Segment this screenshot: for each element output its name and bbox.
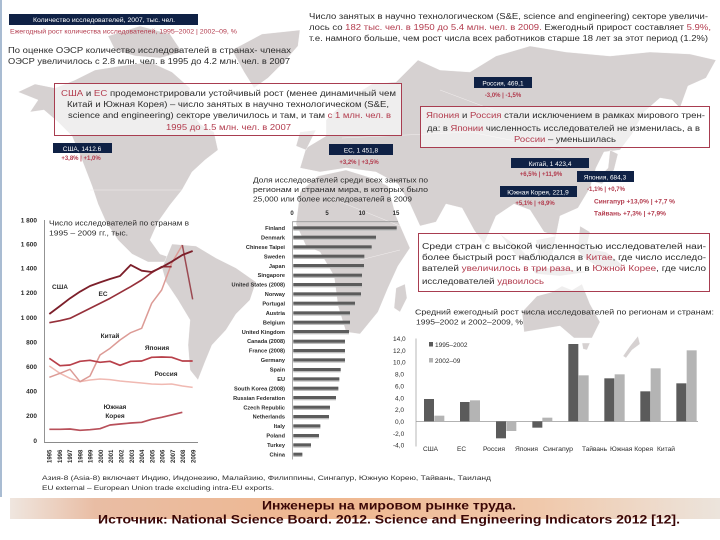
callout: USA and EU growth: Китай и Южная Корея) – число занятых в научно технологическом (S&E,	[67, 100, 389, 109]
caption source: Источник: National Science Board. 2012. Science and Engineering Indicators 2012 [12].	[98, 514, 680, 526]
y axis labels: 1 400	[21, 266, 37, 272]
text block: employment in S&E: Число занятых в научно технологическом (S&E, science and engineering) секторе увеличи-	[309, 12, 708, 21]
y axis labels: -2,0	[393, 431, 405, 438]
country labels	[232, 226, 286, 458]
x axis years: 1997	[68, 449, 74, 463]
x axis years: 1995	[48, 449, 54, 463]
y axis labels: 0,0	[395, 419, 404, 426]
y axis labels: 0	[33, 438, 37, 445]
y axis labels: 12,0	[393, 348, 406, 355]
axis values: 10	[359, 211, 366, 217]
left edge strip	[0, 0, 2, 497]
legend	[429, 342, 468, 365]
category labels	[423, 445, 675, 453]
series labels: США	[52, 284, 68, 291]
country labels: Spain	[270, 368, 286, 374]
y axis labels: 10,0	[393, 360, 406, 367]
country labels: Chinese Taipei	[246, 245, 285, 251]
category labels: ЕС	[457, 446, 466, 453]
country labels: Czech Republic	[243, 405, 285, 411]
map label: Russia: -3,0% | -1,5%	[485, 93, 522, 99]
map label: Japan: Япония, 684,3	[584, 174, 627, 182]
chart title: 1995 – 2009 гг., тыс.	[49, 228, 128, 238]
x axis years: 2002	[120, 449, 126, 463]
map label: USA	[53, 143, 112, 162]
series labels: Япония	[145, 345, 169, 352]
category labels: США	[423, 446, 439, 453]
map label: EU: ЕС, 1 451,8	[344, 148, 379, 154]
category labels: Сингапур	[543, 446, 573, 453]
chart title	[415, 308, 714, 326]
country labels: France (2008)	[249, 349, 285, 355]
chart title: 1995–2002 и 2002–2009, %	[416, 320, 523, 326]
map label: EU: +3,2% | +3,5%	[339, 160, 379, 166]
country labels: China	[269, 452, 286, 458]
chart title: Средний ежегодный рост числа исследователей по регионам и странам:	[415, 308, 714, 316]
y axis labels: 2,0	[395, 407, 404, 414]
x axis years: 1996	[58, 449, 64, 463]
country labels: United States (2008)	[232, 283, 285, 289]
y axis labels: 6,0	[395, 383, 404, 390]
chart title	[49, 218, 189, 238]
map label: Russia: Россия, 469,1	[482, 80, 524, 88]
country labels: Norway	[265, 292, 286, 298]
column chart: average annual growth	[393, 308, 714, 453]
x axis years: 1998	[78, 449, 84, 463]
map label: USA: +3,8% | +1,0%	[61, 156, 101, 162]
caption title: Инженеры на мировом рынке труда.	[262, 500, 516, 512]
map label: Japan: -1,1% | +0,7%	[587, 187, 626, 193]
series labels: ЕС	[98, 291, 108, 298]
axis values: 15	[393, 211, 400, 217]
y axis labels: 1 800	[21, 218, 37, 224]
country labels: Japan	[269, 264, 286, 270]
x axis years: 2003	[130, 449, 136, 463]
map label: Singapore: Сингапур +13,0% | +7,7 %	[594, 200, 676, 206]
country labels: EU	[277, 377, 285, 383]
y axis labels: 14,0	[393, 336, 406, 343]
country labels: Sweden	[264, 254, 286, 260]
legend: 2002–09	[435, 358, 461, 365]
country labels: Poland	[266, 434, 286, 440]
x axis years: 2006	[161, 449, 167, 463]
x axis years: 1999	[89, 449, 95, 463]
y axis labels: 1 000	[21, 315, 37, 322]
y axis labels: -4,0	[393, 443, 405, 450]
horizontal bar chart: researcher share	[232, 176, 428, 460]
map label: South Korea: Южная Корея, 221,9	[507, 190, 569, 196]
x axis years: 2008	[181, 449, 187, 463]
series labels: Южная	[104, 404, 127, 411]
y axis labels: 4,0	[395, 395, 404, 402]
chart title: 25,000 или более исследователей в 2009	[253, 196, 412, 204]
callout: Japan and Russia exception: Япония и Россия стали исключением в рамках мирового трен-	[426, 111, 705, 120]
line chart: researchers by country	[21, 218, 198, 463]
bars	[293, 226, 397, 457]
callout: China and South Korea fastest growth: более быстрый рост наблюдался в Китае , где число исследо-	[422, 253, 706, 262]
x axis years: 2004	[140, 449, 146, 463]
y axis labels: 800	[26, 340, 37, 346]
series labels: Корея	[105, 413, 125, 420]
category labels: Тайвань	[582, 445, 608, 453]
x axis years: 2005	[150, 449, 156, 463]
axis values	[290, 211, 400, 217]
world map background	[18, 26, 716, 380]
callout: China and South Korea fastest growth	[418, 234, 710, 292]
callout: Japan and Russia exception: да: в Японии численность исследователей не изменилась, а в	[427, 124, 700, 133]
country labels: Finland	[265, 226, 286, 232]
country labels: Belgium	[263, 320, 285, 326]
x axis years: 2007	[171, 449, 177, 463]
map label: South Korea	[500, 186, 577, 207]
callout: China and South Korea fastest growth: Среди стран с высокой численностью исследователей наи-	[422, 242, 706, 251]
country labels: Portugal	[262, 302, 285, 308]
chart title: регионам и странам мира, в которых было	[253, 186, 428, 194]
text block: OECD estimate: ОЭСР увеличилось с 2.8 млн. чел. в 1995 до 4.2 млн. чел. в 2007	[8, 57, 291, 66]
category labels: Южная Корея	[610, 446, 653, 453]
callout: China and South Korea fastest growth: исследователей удвоилось	[422, 277, 544, 286]
y axis labels: 1 200	[21, 290, 37, 297]
x axis years	[48, 449, 198, 463]
map label: Taiwan: Тайвань +7,3% | +7,9%	[594, 210, 667, 218]
axes	[44, 220, 198, 442]
legend: 1995–2002	[435, 342, 468, 349]
legend: researchers header: Количество исследователей, 2007, тыс. чел.	[33, 17, 175, 24]
legend: researchers header	[9, 14, 198, 25]
axis values: 5	[325, 211, 329, 217]
y axis labels: 600	[26, 364, 37, 371]
map label: Japan	[577, 171, 634, 193]
axes	[292, 222, 398, 460]
footnote: Азия-8 (Asia-8) включает Индию, Индонезию, Малайзию, Филиппины, Сингапур, Южную Корею, Тайвань, Таиланд	[42, 474, 491, 482]
country labels: Russian Federation	[233, 396, 286, 402]
columns	[424, 344, 697, 438]
y axis labels	[393, 336, 406, 450]
chart title	[253, 176, 428, 204]
country labels: Denmark	[261, 236, 286, 242]
country labels: Turkey	[267, 443, 286, 449]
callout: China and South Korea fastest growth: вателей увеличилось в три раза, и в Южной Корее , где число	[422, 264, 707, 273]
axis values: 0	[290, 211, 294, 217]
text block: employment in S&E: т.е. намного больше, чем рост числа всех работников старше 18 лет за этот период (1.2%)	[309, 34, 708, 43]
legend: growth rate label: Ежегодный рост количества исследователей, 1995–2002 | 2002–09, %	[10, 28, 238, 36]
callout: Japan and Russia exception: России – уменьшилась	[514, 135, 616, 144]
map label: China: +6,5% | +11,9%	[520, 172, 563, 178]
text block: OECD estimate: По оценке ОЭСР количество исследователей в странах- членах	[8, 46, 291, 55]
axes	[416, 338, 698, 446]
country labels: United Kingdom	[242, 330, 285, 336]
footnote	[42, 474, 491, 492]
series labels: Китай	[101, 332, 119, 340]
chart title: Число исследователей по странам в	[49, 218, 189, 228]
country labels: Canada (2008)	[247, 339, 285, 345]
x axis years: 2001	[109, 449, 115, 463]
y axis labels: 200	[26, 413, 37, 420]
country labels: Netherlands	[253, 415, 285, 421]
y axis labels: 1 600	[21, 242, 37, 248]
y axis labels: 400	[26, 388, 37, 396]
text block: employment in S&E: лось со 182 тыс. чел. в 1950 до 5.4 млн. чел. в 2009. Ежегодный прирост составляет 5.9%,	[309, 23, 711, 32]
x axis years: 2000	[99, 449, 105, 463]
map label: USA: США, 1412.6	[63, 146, 102, 153]
map label: EU	[329, 144, 393, 166]
series labels	[52, 284, 178, 420]
country labels: Austria	[266, 311, 286, 317]
callout: USA and EU growth: 1995 до 1.5 млн. чел. в 2007	[166, 123, 292, 132]
category labels: Япония	[515, 446, 538, 453]
data lines	[49, 245, 193, 430]
callout: USA and EU growth	[54, 84, 402, 136]
caption banner	[10, 498, 720, 526]
map label: China	[511, 158, 589, 178]
callout: Japan and Russia exception	[420, 106, 710, 148]
series labels: Россия	[154, 371, 178, 378]
footnote: EU external – European Union trade excluding intra-EU exports.	[42, 485, 274, 492]
text block: OECD estimate	[8, 46, 291, 66]
category labels: Россия	[483, 446, 505, 453]
text block: employment in S&E	[309, 12, 711, 43]
x axis years: 2009	[192, 449, 198, 463]
category labels: Китай	[657, 445, 675, 453]
country labels: Singapore	[258, 273, 285, 279]
country labels: Germany	[261, 358, 286, 364]
country labels: South Korea (2008)	[234, 386, 285, 392]
map label: South Korea: +5,1% | +8,9%	[515, 201, 555, 207]
callout: USA and EU growth: science and engineering) секторе увеличилось и там, и там с 1 млн. чел. в	[68, 111, 391, 120]
callout: USA and EU growth: США и ЕС продемонстрировали устойчивый рост (менее динамичный чем	[61, 89, 396, 98]
country labels: Italy	[274, 424, 286, 430]
y axis labels: 8,0	[395, 372, 404, 378]
y axis labels	[21, 218, 37, 445]
map label: Russia	[474, 77, 532, 99]
map label: China: Китай, 1 423,4	[529, 160, 572, 168]
chart title: Доля исследователей среди всех занятых по	[253, 176, 428, 184]
